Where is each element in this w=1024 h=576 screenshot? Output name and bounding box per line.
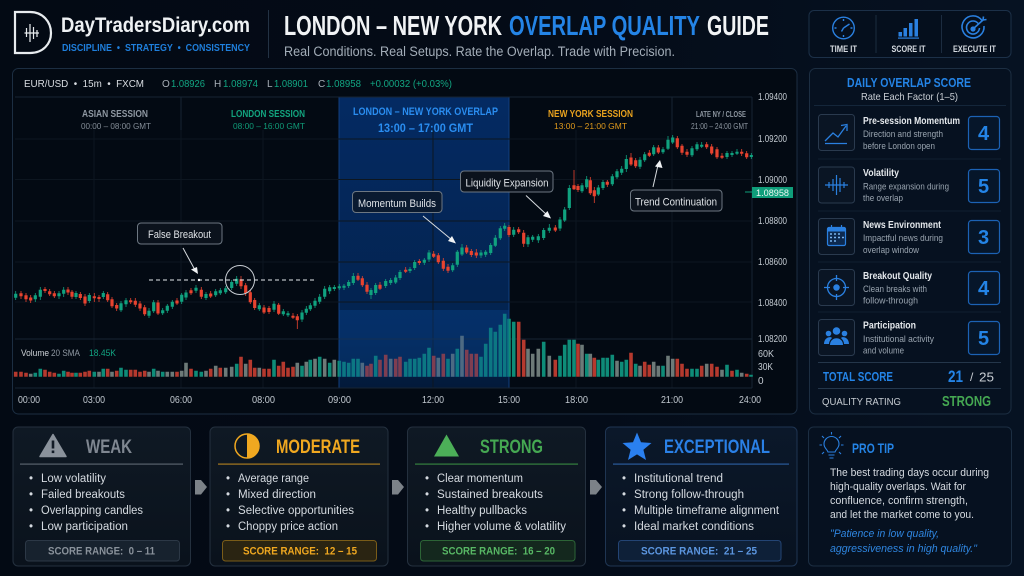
score range: SCORE RANGE: 16 – 20: [442, 546, 555, 558]
factor list: Choppy price action: [238, 521, 338, 533]
total score: 25: [979, 370, 994, 384]
heading: WEAK: [86, 437, 132, 458]
brand name: DayTradersDiary.com: [61, 14, 250, 37]
icon: clock: [833, 17, 854, 39]
total score: TOTAL SCORE: [823, 370, 893, 384]
time axis: 12:00: [422, 395, 444, 406]
title: LONDON – NEW YORK: [284, 10, 502, 41]
panel: weak: [13, 427, 190, 566]
factor list: •: [29, 473, 33, 485]
factor list: •: [622, 505, 626, 517]
tip body: The best trading days occur during: [830, 467, 989, 479]
row: pre-session momentum: 4: [978, 123, 990, 145]
score range: SCORE RANGE: 12 – 15: [243, 546, 357, 558]
quote: "Patience in low quality,: [830, 528, 939, 540]
time axis: 06:00: [170, 395, 192, 406]
icon: crosshair: [824, 275, 849, 300]
arrow: strong to exceptional: [590, 480, 602, 494]
candlesticks: [16, 135, 751, 329]
label: time it: TIME IT: [830, 44, 857, 54]
row: breakout quality: follow-through: [863, 296, 918, 306]
late session: 21:00 – 24:00 GMT: [691, 122, 748, 131]
score range: SCORE RANGE: 0 – 11: [48, 546, 155, 558]
factor list: •: [226, 505, 230, 517]
tip body: high-quality overlaps. Wait for: [830, 481, 966, 493]
row: participation: and volume: [863, 346, 904, 356]
panel: moderate: [210, 427, 388, 566]
time axis: 09:00: [328, 395, 351, 406]
icon: bars: [898, 19, 919, 39]
new york session: 13:00 – 21:00 GMT: [554, 121, 627, 131]
score range: [420, 540, 575, 561]
callout: momentum builds: [352, 192, 456, 244]
subtitle: Real Conditions. Real Setups. Rate the Overlap. Trade with Precision.: [284, 44, 675, 59]
chart header: 1.08926: [171, 79, 205, 90]
factor list: Institutional trend: [634, 473, 723, 485]
factor list: Average range: [238, 473, 309, 485]
row: participation: 5: [978, 328, 989, 350]
price axis: [758, 92, 787, 387]
panel: time score execute: [809, 10, 1011, 58]
factor list: •: [622, 489, 626, 501]
heading: EXCEPTIONAL: [664, 437, 770, 458]
callout: trend continuation: Trend Continuation: [635, 196, 717, 208]
chart header: EUR/USD • 15m • FXCM: [24, 78, 144, 90]
current price tag: [745, 187, 793, 199]
overlap session: 13:00 – 17:00 GMT: [378, 123, 473, 135]
time axis: 18:00: [565, 395, 588, 406]
score range: SCORE RANGE: 21 – 25: [641, 546, 757, 558]
time axis: 08:00: [252, 395, 275, 406]
panel: strong: [408, 427, 586, 566]
false breakout level and circle: [149, 266, 317, 294]
icon: half circle: [235, 434, 259, 458]
factor list: •: [226, 473, 230, 485]
icon: waveform: [825, 175, 848, 195]
factor list: Overlapping candles: [41, 505, 143, 517]
chart header: 1.08958: [326, 79, 361, 90]
tip body: confluence, confirm strength,: [830, 495, 968, 507]
panel: pro tip: [808, 427, 1012, 566]
london session: [231, 109, 305, 131]
factor list: •: [226, 489, 230, 501]
factor list: •: [622, 521, 626, 533]
factor list: [29, 473, 143, 533]
tip body: [830, 467, 989, 521]
chart header: L: [267, 79, 273, 90]
quality rating: [822, 394, 991, 410]
factor list: •: [622, 473, 626, 485]
overlap session highlight: [339, 97, 509, 388]
factor list: [226, 473, 354, 533]
icon: calendar: [828, 225, 846, 246]
asian session: 00:00 – 08:00 GMT: [81, 121, 151, 131]
price axis: 1.08600: [758, 257, 787, 268]
callout: trend continuation: [630, 160, 722, 211]
label: execute it: EXECUTE IT: [953, 44, 996, 54]
callout: momentum builds: Momentum Builds: [358, 198, 436, 210]
factor list: •: [425, 489, 429, 501]
factor list: Failed breakouts: [41, 489, 125, 501]
callout: false breakout: [138, 223, 222, 274]
title: GUIDE: [707, 10, 769, 41]
asian session: [81, 109, 151, 131]
total score: 21: [948, 367, 963, 386]
row: pre-session momentum: Direction and strength: [863, 129, 943, 140]
time axis: 24:00: [739, 395, 761, 406]
time axis: 03:00: [83, 395, 105, 406]
icon: star: [622, 432, 652, 460]
title: [284, 10, 769, 41]
score range: [618, 540, 781, 561]
overlap session: LONDON – NEW YORK OVERLAP: [353, 106, 498, 118]
row: volatility: the overlap: [863, 193, 903, 204]
logo: [15, 12, 250, 54]
time axis: 00:00: [18, 395, 40, 406]
factor list: [425, 473, 566, 533]
heading: MODERATE: [276, 437, 360, 458]
factor list: [622, 473, 780, 533]
late session: [691, 109, 748, 131]
callout: liquidity expansion: Liquidity Expansion: [466, 178, 548, 190]
icon: green triangle: [434, 434, 459, 456]
factor list: Sustained breakouts: [437, 489, 543, 501]
new york session: NEW YORK SESSION: [548, 109, 633, 120]
tip body: and let the market come to you.: [830, 509, 974, 521]
row: news environment: [818, 218, 1000, 256]
time axis: 21:00: [661, 395, 683, 406]
factor list: •: [29, 489, 33, 501]
label: score it: SCORE IT: [892, 44, 926, 54]
price axis: 1.08800: [758, 216, 787, 227]
callout: liquidity expansion: [460, 171, 553, 218]
chart header: [24, 78, 452, 90]
row: news environment: Impactful news during: [863, 233, 943, 244]
overlap tint over volume: [339, 310, 509, 377]
price axis: 0: [758, 376, 764, 387]
row: participation: Institutional activity: [863, 334, 934, 345]
current price tag: 1.08958: [756, 188, 789, 199]
row: participation: [818, 320, 1000, 356]
panel: exceptional: [606, 427, 797, 566]
icon: people: [824, 327, 849, 345]
chart header: C: [318, 79, 325, 90]
row: breakout quality: [818, 270, 1000, 306]
icon: D logo: [15, 12, 51, 53]
row: breakout quality: 4: [978, 278, 990, 300]
factor list: Higher volume & volatility: [437, 521, 566, 533]
factor list: •: [425, 505, 429, 517]
factor list: •: [425, 473, 429, 485]
total score: [823, 367, 994, 386]
price axis: 60K: [758, 349, 774, 360]
new york session: [548, 109, 633, 131]
price axis: 1.08400: [758, 298, 787, 309]
quote: [830, 528, 978, 555]
volume label: 18.45K: [89, 348, 117, 359]
quality rating: STRONG: [942, 394, 991, 410]
price axis: 1.09000: [758, 175, 787, 186]
price axis: 30K: [758, 362, 773, 373]
panel: daily overlap score: [810, 68, 1011, 414]
quote: aggressiveness in high quality.": [830, 543, 978, 555]
price axis: 1.09400: [758, 92, 787, 103]
chart header: O: [162, 79, 170, 90]
arrow: weak to moderate: [195, 480, 207, 494]
late session: LATE NY / CLOSE: [696, 109, 746, 119]
score range: [26, 540, 180, 561]
row: breakout quality: Clean breaks with: [863, 284, 927, 295]
heading: PRO TIP: [852, 440, 894, 456]
row: volatility: Volatility: [863, 167, 899, 179]
title: OVERLAP QUALITY: [509, 10, 700, 41]
asian session: ASIAN SESSION: [82, 109, 148, 120]
factor list: Ideal market conditions: [634, 521, 754, 533]
london session: LONDON SESSION: [231, 109, 305, 120]
score subheading: Rate Each Factor (1–5): [861, 91, 958, 103]
row: pre-session momentum: Pre-session Momentum: [863, 115, 960, 127]
row: news environment: 3: [978, 227, 989, 249]
factor list: Healthy pullbacks: [437, 505, 527, 517]
row: pre-session momentum: before London open: [863, 141, 935, 152]
arrow: moderate to strong: [392, 480, 404, 494]
factor list: Clear momentum: [437, 473, 523, 485]
factor list: Low volatility: [41, 473, 106, 485]
price axis: 1.09200: [758, 134, 787, 145]
brand tagline: DISCIPLINE • STRATEGY • CONSISTENCY: [62, 42, 250, 54]
icon: light bulb: [820, 432, 844, 458]
row: pre-session momentum: [818, 114, 1000, 152]
row: news environment: overlap window: [863, 245, 919, 256]
factor list: •: [29, 521, 33, 533]
factor list: •: [29, 505, 33, 517]
icon: target: [962, 16, 986, 38]
panel: price chart: [12, 68, 797, 414]
chart header: 1.08901: [274, 79, 308, 90]
row: volatility: Range expansion during: [863, 182, 949, 192]
factor list: Selective opportunities: [238, 505, 354, 517]
chart header: +0.00032 (+0.03%): [370, 79, 452, 90]
row: volatility: [818, 167, 1000, 204]
quality rating: QUALITY RATING: [822, 396, 901, 408]
factor list: Multiple timeframe alignment: [634, 505, 780, 517]
volume label: Volume: [21, 348, 49, 359]
session labels: [81, 106, 748, 135]
row: participation: Participation: [863, 320, 916, 332]
score range: [222, 540, 376, 561]
row: volatility: 5: [978, 176, 989, 198]
factor list: •: [226, 521, 230, 533]
volume label: [21, 348, 117, 359]
heading: STRONG: [480, 437, 543, 458]
factor list: Low participation: [41, 521, 128, 533]
price axis: 1.08200: [758, 334, 787, 345]
volume bars: [16, 314, 751, 377]
chart header: 1.08974: [223, 79, 258, 90]
time axis: [18, 395, 761, 406]
callout: false breakout: False Breakout: [148, 229, 211, 241]
score heading: DAILY OVERLAP SCORE: [847, 75, 971, 90]
time axis: 15:00: [498, 395, 520, 406]
factor list: •: [425, 521, 429, 533]
factor list: Mixed direction: [238, 489, 316, 501]
row: breakout quality: Breakout Quality: [863, 270, 932, 282]
factor list: Strong follow-through: [634, 489, 744, 501]
london session: 08:00 – 16:00 GMT: [233, 121, 305, 131]
volume label: 20 SMA: [51, 348, 81, 359]
icon: warning triangle: [40, 434, 66, 456]
total score: /: [970, 370, 974, 384]
overlap session: [353, 106, 498, 135]
chart header: H: [214, 79, 221, 90]
icon: trend chart: [825, 124, 847, 144]
row: news environment: News Environment: [863, 219, 941, 231]
